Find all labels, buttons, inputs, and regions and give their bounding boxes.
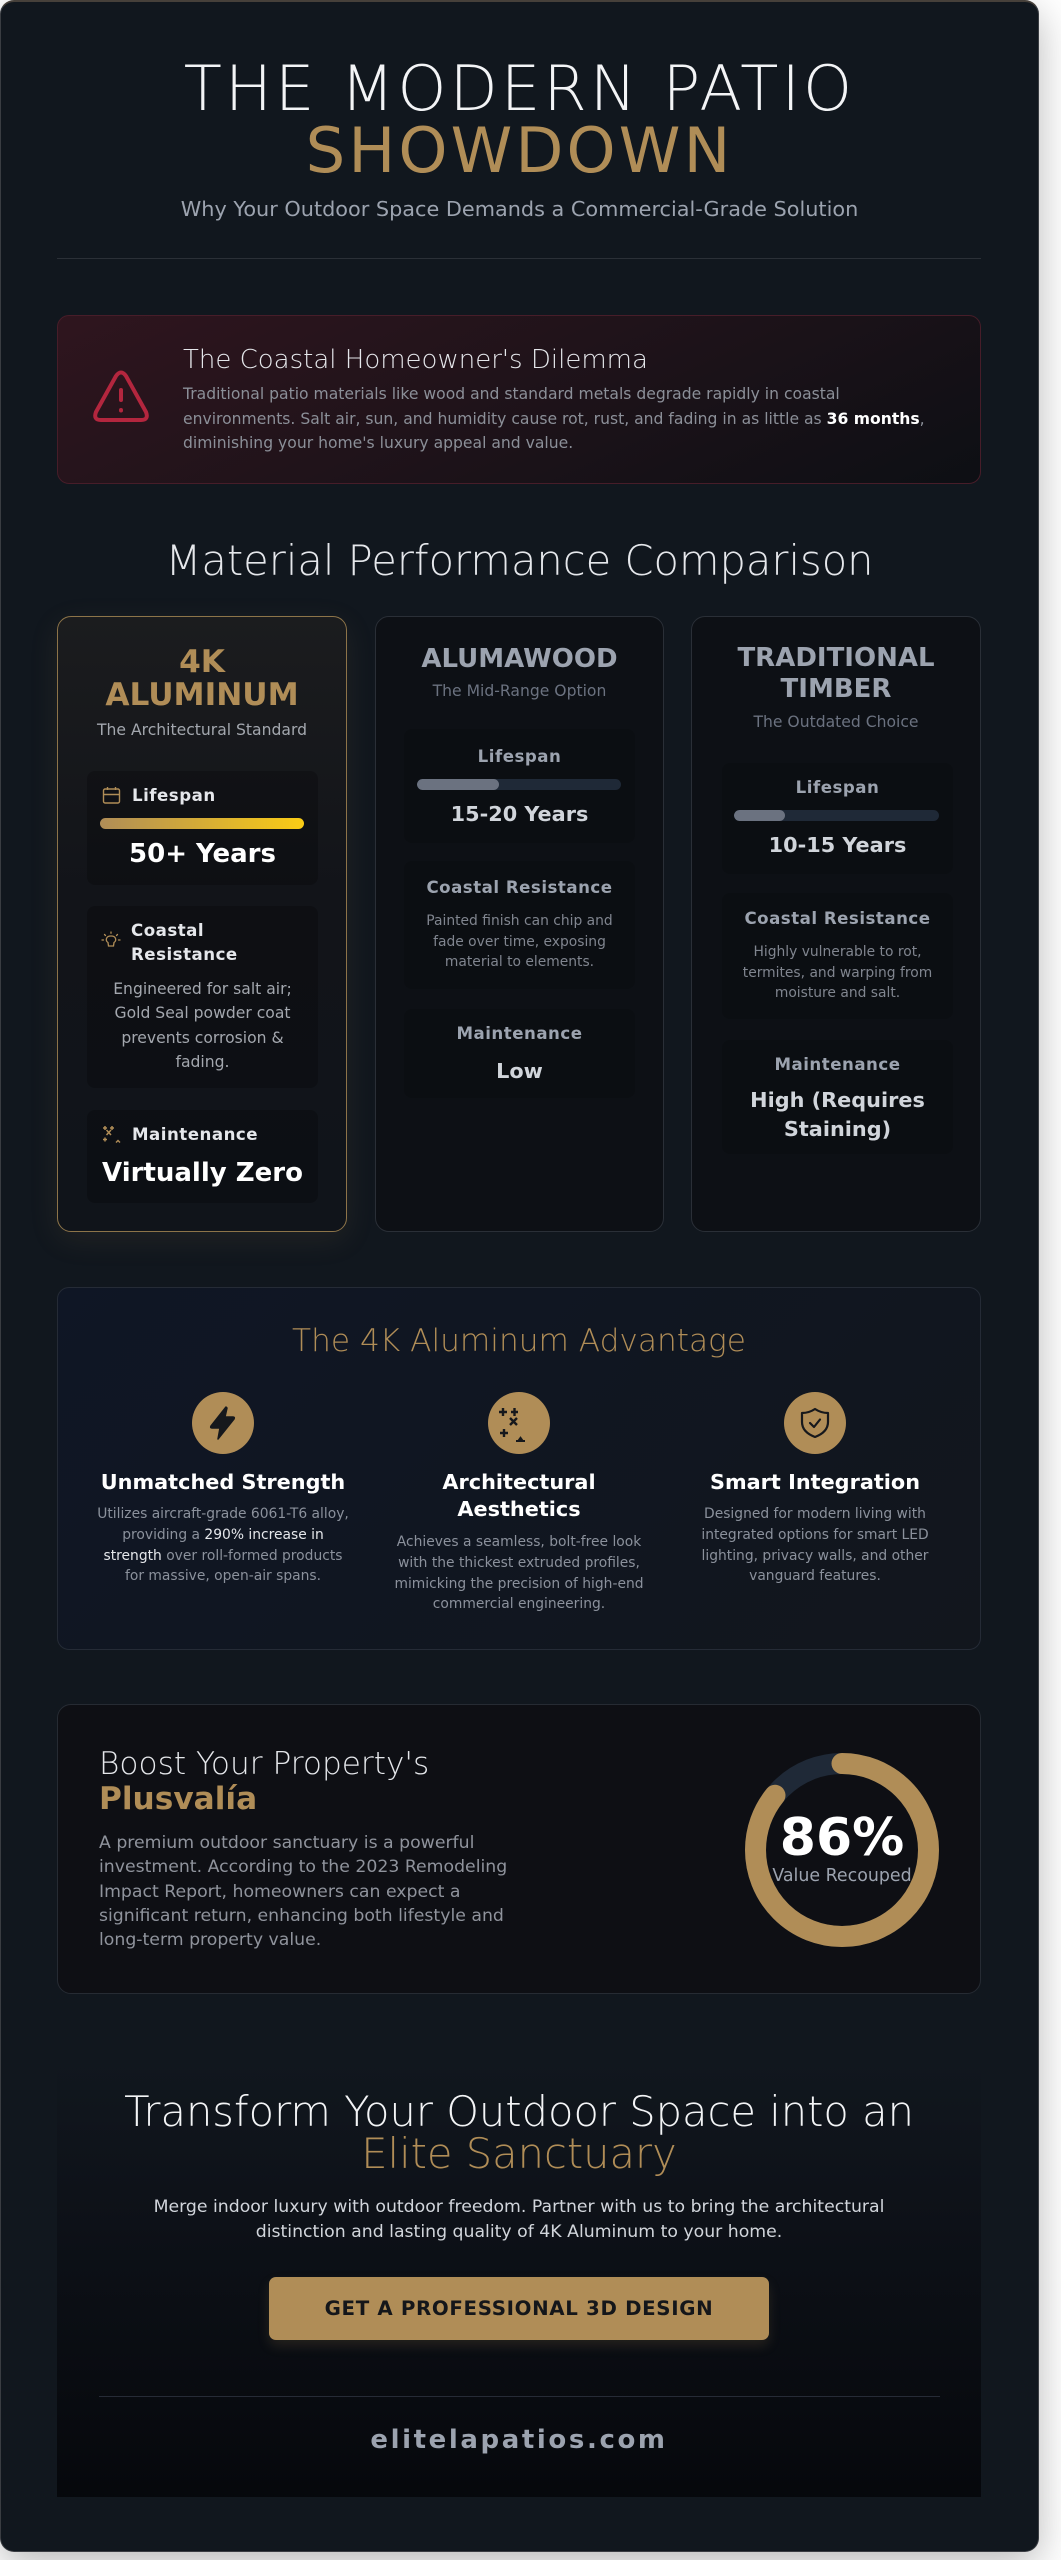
- label: Maintenance: [774, 1055, 901, 1074]
- card subtitle: The Architectural Standard: [97, 721, 307, 739]
- card title: ALUMINUM: [105, 677, 299, 713]
- ROI heading: [99, 1746, 429, 1816]
- icon: sparkles: [103, 1126, 120, 1143]
- feature title: Aesthetics: [457, 1497, 581, 1521]
- panel: 4K aluminum advantage: [57, 1287, 981, 1650]
- CTA text: distinction and lasting quality of 4K Aluminum to your home.: [256, 2222, 782, 2242]
- metric: lifespan: [404, 729, 635, 843]
- feature title: Smart Integration: [710, 1470, 920, 1494]
- panel: 4K aluminum card: [57, 616, 347, 1232]
- value: Staining): [784, 1116, 891, 1140]
- label: Maintenance: [132, 1125, 258, 1144]
- ROI body: Impact Report, homeowners can expect a: [99, 1882, 460, 1902]
- title: THE MODERN PATIO: [184, 52, 855, 125]
- feature text: Achieves a seamless, bolt-free look: [397, 1534, 641, 1550]
- CTA button: GET A PROFESSIONAL 3D DESIGN: [325, 2297, 713, 2320]
- feature text: with the thickest extruded profiles,: [398, 1555, 640, 1571]
- ROI heading: Plusvalía: [99, 1780, 257, 1816]
- feature: unmatched strength: [97, 1392, 349, 1584]
- progress bar: [100, 818, 304, 829]
- card subtitle: The Mid-Range Option: [433, 682, 606, 700]
- feature text: Utilizes aircraft-grade 6061-T6 alloy,: [97, 1506, 349, 1522]
- feature text: for massive, open-air spans.: [125, 1568, 321, 1584]
- metric: maintenance: [404, 1009, 635, 1098]
- website: elitelapatios.com: [370, 2425, 668, 2455]
- panel: coastal dilemma alert: [57, 315, 981, 484]
- description: Painted finish can chip and: [426, 913, 613, 929]
- value: [750, 1088, 925, 1140]
- ROI body: long-term property value.: [99, 1930, 321, 1950]
- icon: lightbulb: [101, 931, 121, 947]
- feature text: strength over roll-formed products: [104, 1548, 342, 1564]
- value: 10-15 Years: [769, 832, 906, 856]
- CTA text: [154, 2197, 884, 2242]
- CTA button: [269, 2277, 769, 2340]
- value: Virtually Zero: [102, 1158, 303, 1188]
- card subtitle: The Outdated Choice: [753, 713, 919, 731]
- progress bar: [417, 779, 621, 790]
- label: Coastal Resistance: [426, 878, 613, 897]
- metric: coastal resistance: [722, 893, 953, 1019]
- metric: maintenance: [722, 1040, 953, 1154]
- footer divider: [99, 2396, 940, 2397]
- label: Lifespan: [478, 747, 561, 766]
- label: Coastal Resistance: [744, 909, 931, 928]
- donut caption: Value Recouped: [772, 1866, 912, 1886]
- description: Engineered for salt air;: [113, 980, 292, 998]
- feature text: vanguard features.: [749, 1568, 881, 1584]
- CTA text: Merge indoor luxury with outdoor freedom. Partner with us to bring the architectural: [154, 2197, 884, 2217]
- alert body: [182, 385, 925, 452]
- card title: 4K: [179, 644, 225, 680]
- metric: coastal resistance: [404, 861, 635, 989]
- description: fade over time, exposing: [433, 934, 606, 950]
- ROI heading: Boost Your Property's: [99, 1746, 429, 1782]
- description: [743, 944, 932, 1001]
- CTA heading: Transform Your Outdoor Space into an: [124, 2087, 914, 2136]
- description: moisture and salt.: [775, 985, 900, 1001]
- feature title: Architectural: [442, 1470, 596, 1494]
- label: [131, 921, 238, 964]
- panel: traditional timber card: [691, 616, 981, 1232]
- description: Highly vulnerable to rot,: [753, 944, 922, 960]
- feature text: mimicking the precision of high-end: [394, 1576, 644, 1592]
- value: 50+ Years: [129, 839, 276, 869]
- feature text: integrated options for smart LED: [701, 1527, 929, 1543]
- feature text: [394, 1534, 644, 1612]
- metric: lifespan: [722, 763, 953, 874]
- alert body: Traditional patio materials like wood and standard metals degrade rapidly in coastal: [183, 385, 840, 403]
- description: [113, 980, 292, 1071]
- label: Lifespan: [796, 778, 879, 797]
- card title: TRADITIONAL: [737, 643, 935, 673]
- feature: smart integration: [701, 1392, 929, 1584]
- label: Lifespan: [132, 786, 216, 805]
- subtitle: Why Your Outdoor Space Demands a Commercial-Grade Solution: [181, 197, 858, 221]
- label: Coastal: [131, 921, 204, 940]
- feature title: [442, 1470, 596, 1521]
- feature title: Unmatched Strength: [101, 1470, 345, 1494]
- ROI body: [99, 1833, 507, 1950]
- description: fading.: [175, 1053, 230, 1071]
- value: 15-20 Years: [451, 802, 588, 826]
- ROI body: A premium outdoor sanctuary is a powerful: [99, 1833, 474, 1853]
- description: termites, and warping from: [743, 965, 932, 981]
- ROI body: investment. According to the 2023 Remodeling: [99, 1857, 507, 1877]
- progress bar: [734, 810, 939, 821]
- card title: TIMBER: [781, 674, 891, 704]
- icon: warning triangle: [93, 370, 149, 422]
- value: High (Requires: [750, 1088, 925, 1112]
- section heading: comparison: Material Performance Comparison: [165, 536, 874, 585]
- feature text: [701, 1506, 929, 1584]
- description: prevents corrosion &: [121, 1029, 284, 1047]
- metric: maintenance: [87, 1110, 318, 1203]
- CTA heading: [124, 2087, 914, 2178]
- alert body: environments. Salt air, sun, and humidity cause rot, rust, and fading in as little as 36 months,: [183, 410, 925, 428]
- title accent: SHOWDOWN: [306, 114, 733, 187]
- section heading: The 4K Aluminum Advantage: [292, 1323, 746, 1359]
- card title: [105, 644, 299, 713]
- metric: lifespan: [87, 771, 318, 885]
- panel: property value ROI: [57, 1704, 981, 1994]
- description: [426, 913, 613, 970]
- description: Gold Seal powder coat: [114, 1004, 290, 1022]
- CTA heading: Elite Sanctuary: [361, 2129, 677, 2178]
- feature text: commercial engineering.: [433, 1596, 605, 1612]
- label: Resistance: [131, 945, 238, 964]
- donut value: 86%: [780, 1808, 904, 1868]
- feature: architectural aesthetics: [394, 1392, 644, 1612]
- ROI body: significant return, enhancing both lifestyle and: [99, 1906, 504, 1926]
- chart: 86% donut: [745, 1753, 939, 1947]
- icon: sparkles: [488, 1392, 550, 1454]
- icon: shield check: [784, 1392, 846, 1454]
- feature text: lighting, privacy walls, and other: [702, 1548, 928, 1564]
- header: [57, 52, 981, 259]
- header divider: [57, 258, 981, 259]
- panel: call to action: [57, 2062, 981, 2497]
- card title: [737, 643, 935, 704]
- feature text: Designed for modern living with: [704, 1506, 926, 1522]
- alert body: diminishing your home's luxury appeal and value.: [183, 434, 573, 452]
- label: Maintenance: [456, 1024, 583, 1043]
- feature text: [97, 1506, 349, 1584]
- icon: calendar: [102, 787, 120, 804]
- alert heading: The Coastal Homeowner's Dilemma: [183, 345, 648, 375]
- panel: alumawood card: [375, 616, 664, 1232]
- value: Low: [496, 1058, 543, 1082]
- metric: coastal resistance: [87, 906, 318, 1088]
- description: material to elements.: [445, 954, 594, 970]
- icon: bolt: [192, 1392, 254, 1454]
- feature text: providing a 290% increase in: [122, 1527, 324, 1543]
- card title: ALUMAWOOD: [421, 644, 618, 674]
